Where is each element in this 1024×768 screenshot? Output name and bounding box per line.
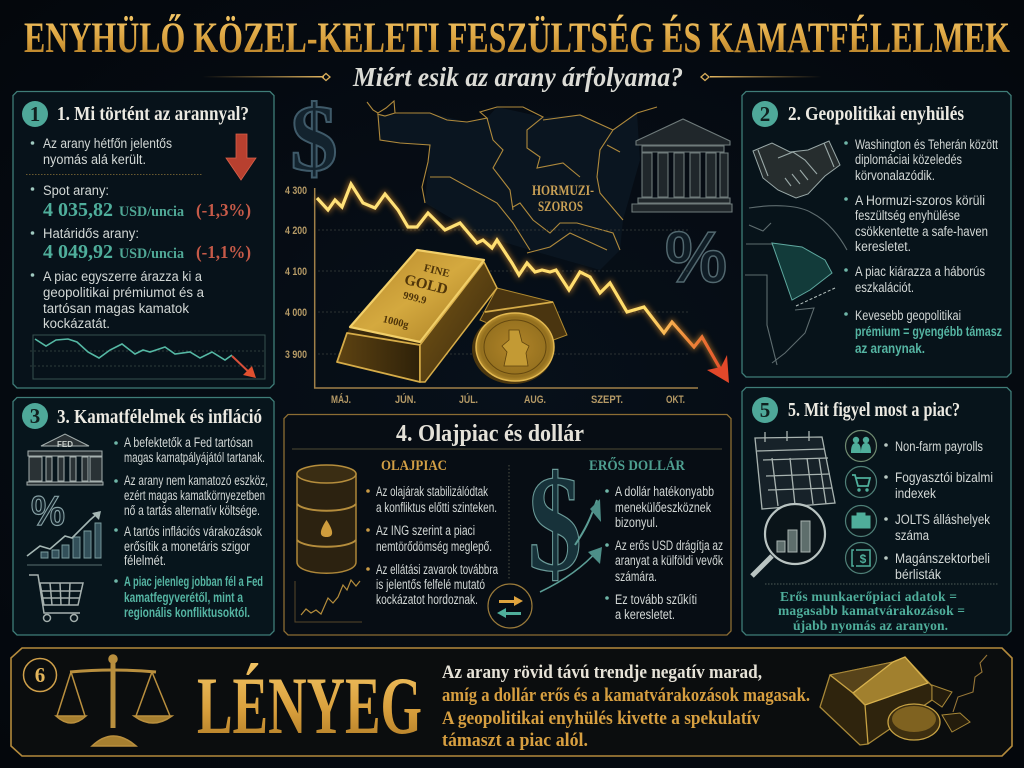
icon: Fed building: FED [57, 440, 73, 449]
summary text: Az arany rövid távú trendje negatív marad, [442, 662, 762, 683]
x axis labels: JÚN. [395, 393, 416, 406]
text block: oil: Az olajárak stabilizálódtak [376, 484, 488, 499]
x axis labels [331, 393, 685, 406]
text block: rates: erősítik a monetáris szigor [124, 539, 250, 554]
falling gold price line [317, 184, 729, 383]
rear gold bar [480, 288, 567, 345]
icon: Fed building [27, 434, 103, 485]
icon: exchange arrows [488, 584, 532, 628]
summary text [442, 662, 810, 751]
text block: geopolitics: az aranynak. [855, 341, 925, 356]
icon: calendar [755, 431, 835, 509]
x axis labels: SZEPT. [591, 394, 623, 406]
text block: geopolitics [844, 137, 1002, 356]
text block: geopolitics: diplomáciai közeledés [855, 152, 962, 167]
text block: geopolitics: Kevesebb geopolitikai [855, 308, 961, 323]
private payrolls: Magánszektorbeli [895, 551, 990, 566]
consumer confidence [884, 470, 993, 501]
text block: dollar: A dollár hatékonyabb [615, 484, 714, 499]
JOLTS [884, 512, 990, 543]
JOLTS: száma [895, 528, 929, 543]
central gold price chart [285, 85, 732, 406]
bar stamp: GOLD [403, 272, 449, 298]
spot gold price: USD/uncia [119, 204, 185, 220]
panel 3: rate fears and inflation [13, 398, 274, 635]
badge 6 [24, 658, 56, 692]
icon: payroll document: $ [860, 552, 867, 566]
icon: shopping cart [29, 575, 83, 622]
text block: geopolitics: A piac kiárazza a háborús [855, 264, 985, 279]
text block: dollar: Az erős USD drágítja az [615, 538, 723, 553]
y axis labels [285, 185, 307, 361]
panel 1: what happened to gold [13, 92, 274, 388]
badge 2: 2 [760, 102, 770, 126]
gold bars and coin [337, 250, 567, 384]
text block: rates: A tartós inflációs várakozások [124, 524, 262, 539]
badge 3: 3 [30, 404, 40, 428]
futures gold price: Határidős arany: [43, 226, 139, 241]
text block: dollar: aranyat a külföldi vevők [615, 553, 723, 568]
map of the Middle East: SZOROS [538, 199, 583, 215]
text block: geopolitics: csökkentette a safe-haven [855, 224, 988, 239]
callout: labour data: újabb nyomás az aranyon. [793, 618, 948, 633]
text block: dollar [605, 484, 723, 622]
icon: red down arrow [226, 134, 256, 180]
text block: rates: regionális konfliktusoktól. [124, 605, 250, 620]
callout: labour data [778, 589, 965, 633]
summary text: amíg a dollár erős és a kamatvárakozások magasak. [442, 685, 810, 706]
icon: people [846, 430, 876, 462]
bar stamp [382, 262, 451, 331]
consumer confidence: Fogyasztói bizalmi [895, 470, 993, 485]
text block: oil: Az ING szerint a piaci [376, 523, 475, 538]
panel 2: geopolitical easing [742, 92, 1011, 377]
consumer confidence: indexek [895, 486, 936, 501]
mini line chart [30, 335, 265, 379]
text block: oil: a konfliktus előtti szinteken. [376, 500, 497, 515]
gold coin [472, 313, 554, 384]
text block: rates: A piac jelenleg jobban fél a Fed [124, 574, 263, 589]
text block: geopolitics: keresletet. [855, 239, 911, 254]
icon: magnifier with bars [752, 504, 825, 576]
icon: percent: % [31, 487, 65, 534]
y axis labels: 4 300 [285, 185, 307, 197]
futures gold price: USD/uncia [119, 246, 185, 262]
private payrolls [884, 551, 990, 582]
bar stamp: 999.9 [402, 290, 427, 307]
text block: dollar: a keresletet. [615, 607, 675, 622]
chart gridlines and axes [315, 188, 698, 388]
badge 5: 5 [760, 398, 770, 422]
panel 4: oil market and dollar [284, 414, 731, 635]
watchlist items [846, 430, 993, 582]
spot gold price [31, 183, 251, 221]
icon: percent sign: % [665, 218, 727, 298]
badge 1 [22, 101, 48, 127]
icon: handshake [753, 141, 840, 198]
y axis labels: 3 900 [285, 349, 307, 361]
panel 1 heading: 1. Mi történt az arannyal? [57, 103, 249, 125]
badge 3 [22, 403, 48, 429]
big heading: LÉNYEG: LÉNYEG [197, 660, 422, 751]
icon: briefcase [846, 506, 876, 536]
text block: geopolitics: feszültség enyhülése [855, 208, 960, 223]
y axis labels: 4 100 [285, 266, 307, 278]
panel 5: what the market is watching [742, 388, 1011, 635]
badge 2 [752, 101, 778, 127]
y axis labels: 4 000 [285, 307, 307, 319]
badge 5 [752, 397, 778, 423]
summary text: támaszt a piac alól. [442, 730, 588, 751]
map of the Middle East [367, 101, 657, 270]
badge 6: 6 [35, 663, 45, 687]
icon: balance scales [56, 655, 172, 746]
badge 1: 1 [30, 102, 40, 126]
bullet: market pricing: tartósan magas kamatok [43, 301, 189, 316]
panel 3 heading: 3. Kamatfélelmek és infláció [57, 406, 262, 428]
bar stamp: 1000g [382, 314, 410, 331]
text block: oil: kockázatot hordoznak. [376, 592, 478, 607]
text block: rates [114, 435, 268, 620]
bullet: market pricing: A piac egyszerre árazza ki a [43, 269, 202, 284]
bullet: market pricing [31, 269, 204, 331]
non-farm payrolls: Non-farm payrolls [895, 439, 983, 454]
summary text: A geopolitikai enyhülés kivette a spekulatív [442, 708, 760, 729]
callout: labour data: Erős munkaerőpiaci adatok = [780, 589, 957, 604]
text block: dollar: Ez tovább szűkíti [615, 592, 697, 607]
icon: dollar with rising arrows: $ [528, 447, 582, 601]
text block: rates: ezért magas kamatkörnyezetben [124, 488, 265, 503]
text block: oil: Az ellátási zavarok továbbra [376, 562, 498, 577]
private payrolls: bérlisták [895, 567, 941, 582]
x axis labels: MÁJ. [331, 393, 351, 406]
text block: rates: félelmét. [124, 553, 166, 568]
text block: geopolitics: körvonalazódik. [855, 168, 935, 183]
panel 6: bottom line [11, 648, 1012, 756]
text block: oil: nemtörődömség meglepő. [376, 539, 492, 554]
icon: bank building [632, 119, 732, 212]
icon: oil barrel [297, 465, 356, 573]
text block: rates: nő a tartás alternatív költsége. [124, 503, 260, 518]
futures gold price [31, 226, 251, 263]
y axis labels: 4 200 [285, 225, 307, 237]
spot gold price: Spot arany: [43, 183, 109, 198]
text block: dollar: számára. [615, 569, 657, 584]
x axis labels: OKT. [666, 394, 685, 406]
icon: oil price mini chart [295, 580, 362, 622]
callout: labour data: magasabb kamatvárakozások = [778, 603, 965, 618]
panel 5 heading: 5. Mit figyel most a piac? [788, 399, 960, 421]
dollar column heading: ERŐS DOLLÁR [589, 457, 685, 474]
oil column heading: OLAJPIAC [381, 458, 447, 474]
text block: dollar: bizonyul. [615, 515, 658, 530]
panel 4 heading: 4. Olajpiac és dollár [396, 421, 584, 447]
spot gold price: (-1,3%) [196, 200, 251, 221]
icon: map of the Arabian peninsula [745, 206, 847, 365]
text block: rates: magas kamatpályájától tartanak. [124, 450, 265, 465]
icon: dollar sign: $ [290, 85, 338, 191]
text block: rates: kamatfegyverétől, mint a [124, 590, 243, 605]
bar stamp: FINE [423, 262, 451, 280]
bullet: market pricing: geopolitikai prémiumot és a [43, 285, 204, 300]
subtitle: Miért esik az arany árfolyama? [352, 62, 683, 92]
x axis labels: JÚL. [459, 393, 478, 406]
text block: rates: A befektetők a Fed tartósan [124, 435, 253, 450]
icon: cracked gold bar and coin [820, 655, 987, 745]
text block: oil [366, 484, 498, 607]
subtitle [202, 62, 822, 92]
Strait of Hormuz label: HORMUZI- [532, 183, 594, 199]
bullet: market pressure: nyomás alá került. [43, 152, 146, 167]
bullet: market pressure [31, 136, 172, 167]
x axis labels: AUG. [524, 394, 546, 406]
futures gold price: (-1,1%) [196, 242, 251, 263]
JOLTS: JOLTS álláshelyek [895, 512, 990, 527]
text block: dollar: menekülőeszköznek [615, 500, 711, 515]
spot gold price: 4 035,82 [43, 199, 113, 221]
bullet: market pressure: Az arany hétfőn jelentős [43, 136, 172, 151]
icon: cart [846, 466, 876, 498]
futures gold price: 4 049,92 [43, 241, 113, 263]
text block: geopolitics: A Hormuzi-szoros körüli [855, 193, 985, 208]
bullet: market pricing: kockázatát. [43, 316, 110, 331]
text block: rates: Az arany nem kamatozó eszköz, [124, 473, 268, 488]
main gold bar [337, 250, 497, 382]
icon: rising bar chart [27, 511, 102, 565]
icon: payroll document [846, 542, 876, 574]
text block: oil: is jelentős felfelé mutató [376, 577, 485, 592]
text block: geopolitics: eszkalációt. [855, 280, 914, 295]
panel 2 heading: 2. Geopolitikai enyhülés [788, 103, 964, 125]
